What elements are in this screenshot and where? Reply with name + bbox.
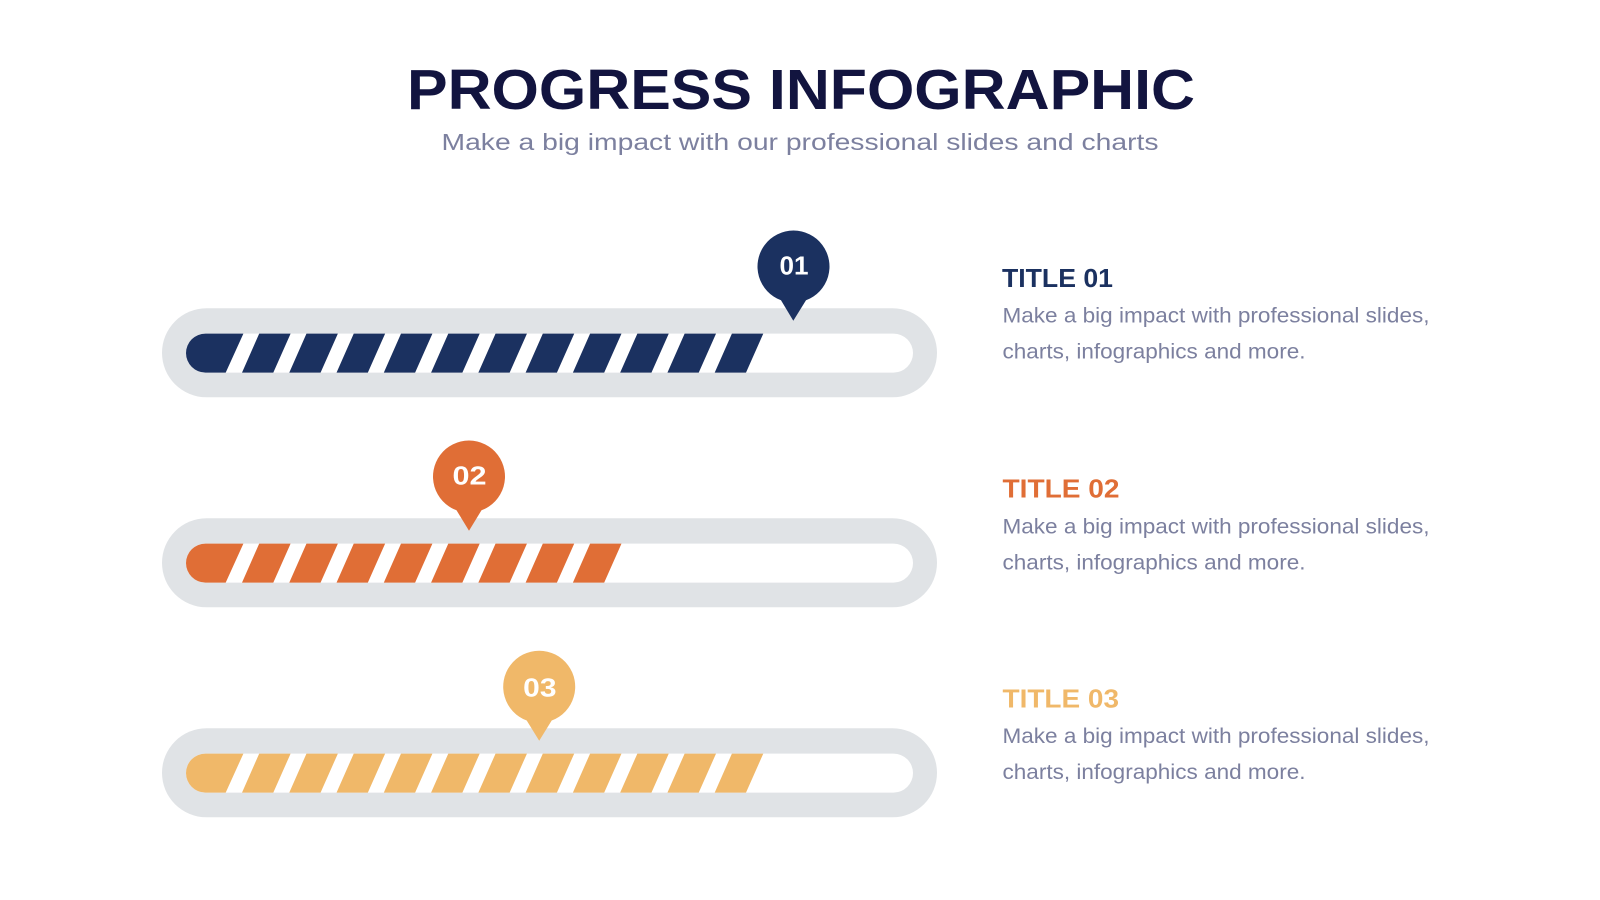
panel: progress row 03 [162,651,937,817]
marker pin 01 [758,231,830,321]
progress fill 01 (striped) [186,334,763,373]
text block: title 02: TITLE 02 [1002,473,1120,503]
text block: title 03 [1002,683,1430,784]
text block: title 01: charts, infographics and more. [1002,341,1306,364]
panel: progress row 01 [162,231,937,397]
progress fill 02 (striped) [186,544,621,583]
text block: title 03: charts, infographics and more. [1002,761,1306,784]
text block: title 02: Make a big impact with professional slides, [1002,515,1430,538]
panel: progress row 02 [162,441,937,607]
subtitle: Make a big impact with our professional slides and charts [442,129,1158,155]
marker pin 01: 01 [780,251,808,281]
marker pin 03: 03 [523,672,556,702]
text block: title 03: Make a big impact with professional slides, [1002,725,1430,748]
text block: title 01 [1002,263,1430,364]
text block: title 02 [1002,473,1430,574]
progress track 03 [162,728,937,817]
title: PROGRESS INFOGRAPHIC [407,58,1195,122]
text block: title 01: TITLE 01 [1002,263,1113,293]
progress fill 03 (striped) [186,754,763,793]
text block: title 03: TITLE 03 [1002,683,1119,713]
marker pin 02: 02 [452,461,486,491]
marker pin 02 [433,441,505,531]
progress track 01 [162,308,937,397]
progress track 02 [162,518,937,607]
marker pin 03 [503,651,575,741]
text block: title 02: charts, infographics and more. [1002,551,1306,574]
text block: title 01: Make a big impact with professional slides, [1002,305,1430,328]
